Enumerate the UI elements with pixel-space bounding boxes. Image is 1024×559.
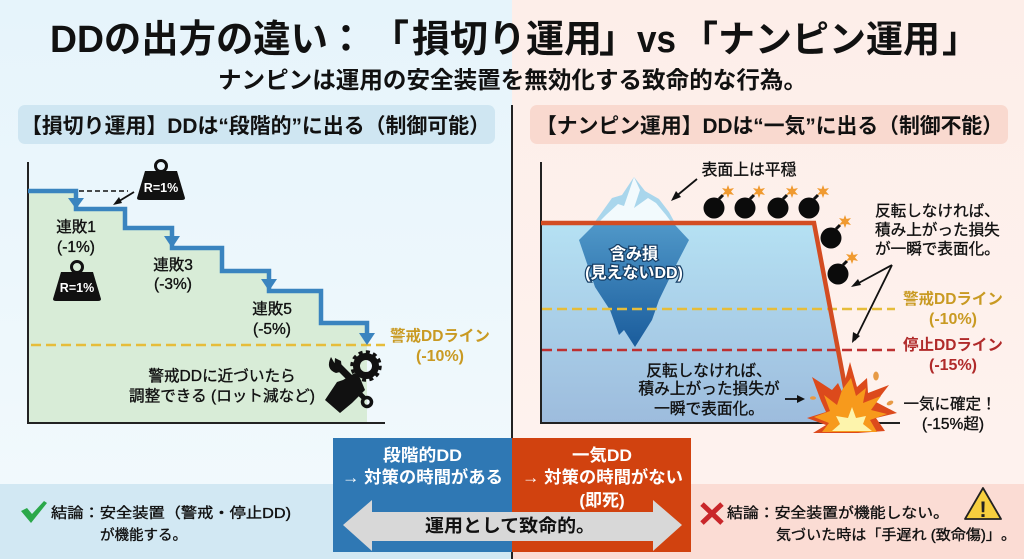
label: confirmed at once: (-15%超) (922, 415, 984, 433)
text: loss surfaces instantly (lower) (638, 362, 780, 418)
label: warning DD line (390, 326, 490, 365)
text: right conclusion: 気づいた時は「手遅れ (致命傷)」。 (776, 527, 1016, 544)
box: sudden DD: 一気DD (572, 446, 632, 465)
chart: water area (541, 162, 900, 423)
box: stepwise DD: 段階的DD (383, 446, 462, 465)
label: streak 3: 連敗3 (153, 256, 193, 274)
icon: iceberg: (見えないDD) (585, 264, 683, 282)
chart: DD lines (542, 309, 895, 350)
panel heading: loss-cut (18, 105, 495, 144)
text: loss surfaces instantly (upper): 反転しなければ、 (875, 202, 1000, 220)
text: loss surfaces instantly (lower): 積み上がった損失が (638, 380, 780, 398)
text: loss surfaces instantly (upper) (875, 202, 1000, 258)
title: DDの出方の違い (50, 19, 328, 61)
chart: staircase equity (28, 162, 385, 423)
title: 」 (599, 19, 637, 61)
conclusion: right (702, 488, 1016, 544)
subtitle: ナンピンは運用の安全装置を無効化する致命的な行為。 (218, 67, 807, 93)
annotation: R=1% dashed guide and arrow (79, 191, 134, 205)
icon: weight R=1% lower (53, 262, 101, 301)
text: left conclusion (51, 505, 291, 544)
label: warning DD line: 警戒DDライン (390, 326, 490, 345)
arrows: to lines (851, 265, 892, 343)
arrow: to explosion (785, 395, 805, 403)
panel heading: averaging down: 【ナンピン運用】DDは“一気”に出る（制御不能） (536, 115, 1003, 138)
icon: iceberg (579, 177, 689, 347)
background: left side (0, 0, 512, 559)
conclusion band background: right (512, 484, 1024, 559)
center divider (511, 105, 513, 559)
box: stepwise DD (333, 438, 512, 552)
text: right conclusion (727, 505, 1016, 544)
icons: bombs (704, 185, 858, 284)
panel heading: averaging down (530, 105, 1008, 144)
text: loss surfaces instantly (upper): が一瞬で表面化。 (875, 240, 1000, 258)
label: confirmed at once: 一気に確定！ (903, 395, 997, 413)
panel: sudden drawdown (averaging down) (530, 105, 1008, 433)
text: can adjust (129, 367, 315, 405)
box: sudden DD: (即死) (579, 491, 625, 510)
label: streak 5 (252, 300, 292, 338)
label: stop DD line: 停止DDライン (903, 336, 1003, 354)
title: ナンピン運用 (718, 19, 940, 60)
label: streak 1: (-1%) (57, 239, 95, 256)
label: calm on the surface (671, 161, 797, 201)
panel: stepwise drawdown (loss-cut) (18, 105, 495, 423)
label: calm on the surface: 表面上は平穏 (702, 161, 797, 179)
conclusion band background: left (0, 484, 512, 559)
text: loss surfaces instantly (lower): 反転しなければ、 (646, 362, 772, 380)
label: warning DD line: (-10%) (416, 348, 464, 365)
label: streak 3: (-3%) (154, 276, 192, 293)
icon: weight R=1% top (137, 160, 185, 200)
title (50, 19, 979, 61)
box: sudden DD: → 対策の時間がない (522, 467, 683, 487)
icon: hand, wrench and gear (325, 352, 380, 413)
icon: check mark (21, 501, 47, 523)
label: streak 5: (-5%) (253, 321, 291, 338)
arrow: double-headed: 運用として致命的。 (425, 515, 595, 536)
title: 損切り運用 (412, 19, 602, 61)
label: streak 5: 連敗5 (252, 300, 292, 318)
label: warning DD line (903, 289, 1003, 328)
text: left conclusion: が機能する。 (100, 527, 187, 544)
icon: explosion (807, 362, 897, 433)
box: sudden DD (512, 438, 691, 552)
icon: iceberg: 含み損 (610, 244, 658, 263)
text: loss surfaces instantly (upper): 積み上がった損失 (875, 221, 1000, 239)
title: 」 (942, 19, 979, 60)
label: stop DD line: (-15%) (929, 357, 977, 374)
title: vs (637, 19, 676, 61)
icon: weight R=1% top: R=1% (144, 181, 178, 195)
icon: warning triangle: ! (979, 497, 987, 522)
label: streak 3 (153, 256, 193, 293)
text: can adjust: 調整できる (ロット減など) (129, 387, 315, 405)
center panel: comparison (333, 438, 691, 552)
text: left conclusion: 結論：安全装置（警戒・停止DD) (51, 505, 291, 522)
title: 「 (681, 19, 718, 60)
label: streak 1 (56, 218, 96, 256)
icon: cross mark (702, 504, 722, 523)
title: ： (327, 19, 365, 61)
conclusion: left (21, 501, 291, 544)
icon: weight R=1% lower: R=1% (60, 281, 94, 295)
background: right side (512, 0, 1024, 559)
label: warning DD line: 警戒DDライン (903, 289, 1003, 308)
label: confirmed at once (903, 395, 997, 433)
text: can adjust: 警戒DDに近づいたら (148, 367, 296, 385)
arrow: double-headed (343, 500, 682, 551)
label: stop DD line (903, 336, 1003, 374)
panel heading: loss-cut: 【損切り運用】DDは“段階的”に出る（制御可能） (21, 115, 490, 138)
icon: warning triangle (965, 488, 1001, 522)
text: right conclusion: 結論：安全装置が機能しない。 (727, 505, 949, 522)
box: stepwise DD: → 対策の時間がある (342, 467, 503, 487)
label: warning DD line: (-10%) (929, 311, 977, 328)
text: loss surfaces instantly (lower): 一瞬で表面化。 (654, 400, 764, 418)
label: streak 1: 連敗1 (56, 218, 96, 236)
title: 「 (371, 19, 409, 61)
chart: equity line (541, 223, 846, 392)
